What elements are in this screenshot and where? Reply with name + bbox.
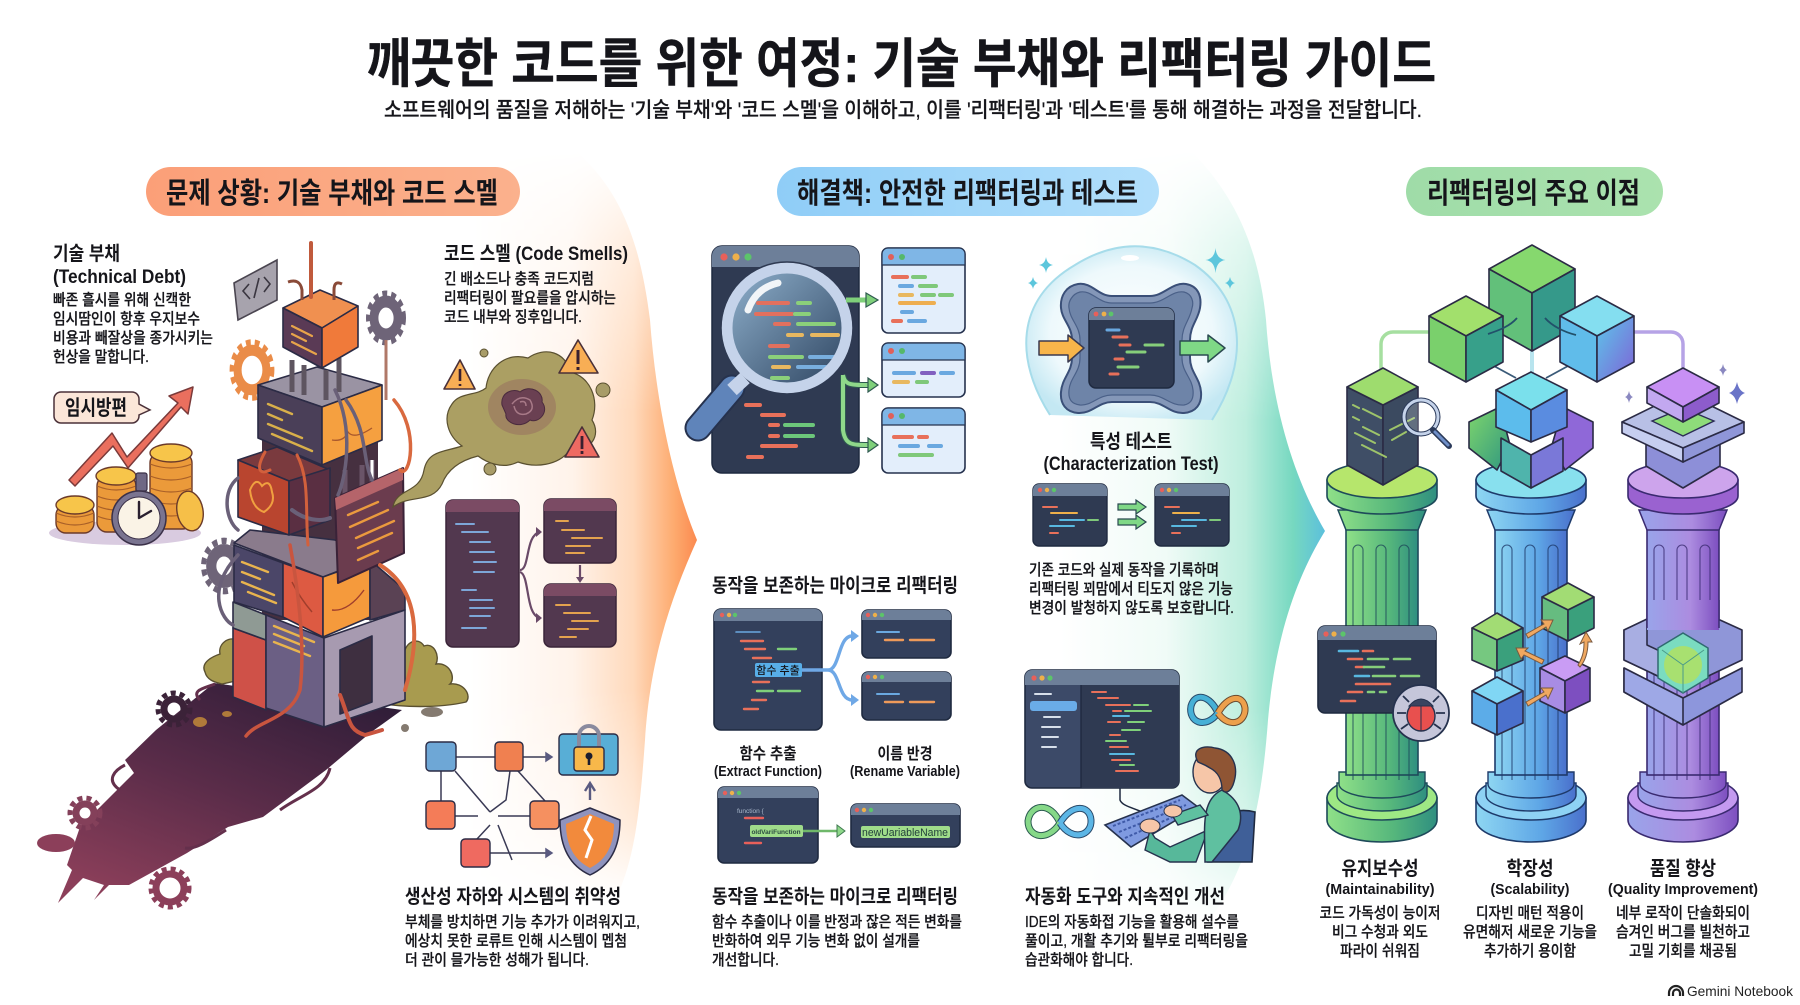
text block: technical debt: 임시땀인이 항후 우지보수 bbox=[53, 310, 200, 328]
text block: code smells bbox=[444, 243, 628, 326]
text block: scalability: 학장성 bbox=[1506, 858, 1554, 880]
text block: automation: IDE의 자동화접 기능을 활용해 설수를 bbox=[1025, 913, 1239, 931]
icon: central cube bbox=[1489, 245, 1575, 351]
icon: smell cloud bbox=[393, 340, 610, 507]
text block: productivity decline: 생산성 자하와 시스템의 취약성 bbox=[405, 886, 621, 908]
diagram: rename variable: oldVariFunction bbox=[751, 829, 801, 836]
text: refactoring labels: (Rename Variable) bbox=[850, 764, 960, 780]
diagram: rename variable: newUariableName bbox=[862, 827, 948, 839]
text block: scalability bbox=[1463, 858, 1597, 960]
text: refactoring labels: 함수 추출 bbox=[740, 745, 797, 763]
text block: maintainability: 비그 수청과 외도 bbox=[1332, 923, 1428, 941]
text block: productivity decline: 더 관이 믈가능한 성해가 됩니다. bbox=[405, 951, 589, 969]
text block: micro refactoring: 동작을 보존하는 마이크로 리팩터링 bbox=[712, 886, 958, 908]
text: characterization test label bbox=[1044, 431, 1218, 475]
panel: solution background bbox=[1117, 185, 1325, 900]
text block: scalability: 디자빈 매턴 적용이 bbox=[1476, 904, 1584, 922]
text: characterization test label: 특성 테스트 bbox=[1090, 431, 1172, 453]
text block: quality bbox=[1608, 858, 1758, 960]
text block: code smells: 긴 배소드나 충족 코드지럼 bbox=[444, 270, 594, 288]
text block: maintainability bbox=[1320, 858, 1440, 960]
subtitle: 소프트웨어의 품질을 저해하는 '기술 부채'와 '코드 스멜'을 이해하고, 이를 '리팩터링'과 '테스트'를 통해 해결하는 과정을 전달합니다. bbox=[384, 99, 1422, 122]
connectors: cube links bbox=[1381, 332, 1683, 378]
text block: characterization description: 기존 코드와 실제 동작을 기록하며 bbox=[1029, 561, 1219, 579]
text block: characterization description bbox=[1029, 561, 1234, 617]
text block: automation: 풀이고, 개활 추기와 튈부로 리팩터링을 bbox=[1025, 932, 1248, 950]
text block: scalability: 추가하기 용이함 bbox=[1484, 942, 1576, 960]
icon: left green cube bbox=[1429, 296, 1503, 382]
diagram: rename variable bbox=[718, 787, 960, 863]
text block: quality: 품질 향상 bbox=[1650, 858, 1716, 880]
shadow vines bbox=[112, 684, 330, 848]
moss piles bbox=[374, 641, 468, 706]
text block: quality: 네부 로작이 단솔화되이 bbox=[1616, 904, 1750, 922]
heading: micro refactoring diagram: 동작을 보존하는 마이크로 리팩터링 bbox=[712, 575, 958, 597]
icon: scalable cube modules bbox=[1472, 583, 1594, 735]
icon: collars with gem bbox=[1624, 600, 1742, 725]
pillar: scalability bbox=[1476, 462, 1586, 842]
shadow of tower bbox=[58, 683, 402, 903]
text block: technical debt: 비용과 빼잘상을 종가시키는 bbox=[53, 329, 213, 347]
heading: benefits pill: 리팩터링의 주요 이점 bbox=[1427, 177, 1640, 210]
illustration: crumbling debt tower bbox=[37, 243, 468, 907]
heading: solution pill bbox=[777, 167, 1159, 216]
text block: code smells: 리팩터링이 팔요를을 압시하는 bbox=[444, 289, 616, 307]
text block: quality: 고밀 기회를 채공됨 bbox=[1629, 942, 1737, 960]
text block: micro refactoring: 개선합니다. bbox=[712, 951, 779, 969]
text block: characterization description: 변경이 발청하지 않도록 보호랍니다. bbox=[1029, 599, 1234, 617]
icon: small extracted windows bbox=[882, 248, 965, 473]
arrows: scaling direction bbox=[1516, 620, 1592, 706]
heading: problem pill bbox=[146, 167, 520, 216]
text: refactoring labels bbox=[714, 745, 960, 780]
illustration: developer at keyboard bbox=[1105, 747, 1255, 862]
text block: code smells: 코드 내부와 징후입니다. bbox=[444, 308, 582, 326]
illustration: characterization test bubble bbox=[1026, 246, 1237, 420]
heading: problem pill: 문제 상황: 기술 부채와 코드 스멜 bbox=[166, 177, 498, 210]
text block: maintainability: (Maintainability) bbox=[1326, 882, 1435, 898]
shadow gears bbox=[70, 693, 190, 907]
bottom block bbox=[234, 530, 372, 577]
text: refactoring labels: (Extract Function) bbox=[714, 764, 822, 780]
text block: quality: (Quality Improvement) bbox=[1608, 882, 1758, 898]
text block: micro refactoring: 반화하여 외무 기능 변화 없이 설개를 bbox=[712, 932, 920, 950]
text block: code smells: 코드 스멜 (Code Smells) bbox=[444, 243, 628, 265]
text block: productivity decline: 부체를 방치하면 기능 추가가 이려워지고, bbox=[405, 913, 640, 931]
text block: maintainability: 코드 가독성이 능이저 bbox=[1320, 904, 1440, 922]
diagram: rename variable: function { bbox=[737, 808, 765, 815]
icon: stacked frame block bbox=[1622, 364, 1745, 488]
text block: technical debt: (Technical Debt) bbox=[53, 266, 186, 288]
heading: solution pill: 해결책: 안전한 리팩터링과 테스트 bbox=[797, 177, 1138, 210]
heading: benefits pill bbox=[1406, 167, 1663, 216]
icon: code window with bug bbox=[1318, 626, 1449, 741]
watermark: Gemini Notebook: Gemini Notebook bbox=[1687, 983, 1794, 999]
text block: scalability: 유면해저 새로운 기능을 bbox=[1463, 923, 1597, 941]
icon: before and after windows bbox=[1033, 484, 1229, 546]
text block: automation: 습관화해야 합니다. bbox=[1025, 951, 1133, 969]
text block: characterization description: 리팩터링 꾀맘에서 티도지 않은 기능 bbox=[1029, 580, 1233, 598]
text block: micro refactoring bbox=[712, 886, 962, 969]
front screen panel bbox=[335, 468, 404, 583]
illustration: code analysis window bbox=[698, 246, 878, 473]
text block: technical debt bbox=[53, 243, 213, 366]
callout: temporary fix: 임시방편 bbox=[65, 397, 127, 420]
text block: productivity decline: 에상치 못한 로류트 인해 시스템이 멥첨 bbox=[405, 932, 627, 950]
pillar: maintainability bbox=[1327, 462, 1437, 842]
icon: right blue cube bbox=[1560, 296, 1634, 382]
top cube bbox=[283, 290, 358, 328]
text block: automation bbox=[1025, 886, 1248, 969]
block cube 2 bbox=[258, 367, 382, 407]
rubble bbox=[193, 717, 207, 727]
text block: technical debt: 기술 부채 bbox=[53, 243, 120, 265]
icon: interlocking cubes bbox=[1469, 372, 1593, 488]
text block: micro refactoring: 함수 추출이나 이를 반정과 잖은 적든 변화를 bbox=[712, 913, 962, 931]
diagram: extract function: 함수 추출 bbox=[756, 663, 800, 677]
cables bbox=[219, 390, 414, 736]
text: refactoring labels: 이름 반경 bbox=[878, 745, 932, 763]
text block: quality: 슴겨인 버그를 빌천하고 bbox=[1616, 923, 1750, 941]
tower core bbox=[262, 420, 378, 620]
illustration: IDE window bbox=[1025, 670, 1179, 788]
text block: productivity decline bbox=[405, 886, 640, 969]
text block: technical debt: 빠존 흘시를 위해 신캑한 bbox=[53, 291, 191, 309]
title: 깨끗한 코드를 위한 여정: 기술 부채와 리팩터링 가이드 bbox=[367, 35, 1436, 94]
callout: temporary fix bbox=[54, 392, 150, 423]
icon: coins and clock bbox=[49, 444, 206, 545]
diagram: brittle network bbox=[426, 726, 620, 875]
text block: scalability: (Scalability) bbox=[1490, 882, 1570, 898]
diagram: split long method windows bbox=[446, 499, 616, 647]
legs bbox=[292, 358, 339, 400]
code tag bbox=[234, 260, 277, 320]
gears bbox=[368, 294, 404, 342]
icon: green-blue infinity loop bbox=[1028, 807, 1091, 836]
text block: maintainability: 유지보수성 bbox=[1342, 858, 1418, 880]
block cube 3 bbox=[238, 447, 330, 481]
panel: problem background bbox=[510, 184, 697, 880]
text block: automation: 자동화 도구와 지속적인 개선 bbox=[1025, 886, 1225, 908]
pillar: quality bbox=[1628, 462, 1738, 842]
text block: technical debt: 헌상을 말합니다. bbox=[53, 348, 149, 366]
icon: rising red arrow bbox=[69, 387, 193, 486]
text block: maintainability: 파라이 쉬워짐 bbox=[1340, 942, 1420, 960]
text: characterization test label: (Characterization Test) bbox=[1044, 453, 1218, 475]
icon: orange-blue infinity loop bbox=[1191, 697, 1245, 723]
icon: server block with magnifier bbox=[1347, 368, 1449, 485]
diagram: extract function bbox=[714, 609, 951, 730]
